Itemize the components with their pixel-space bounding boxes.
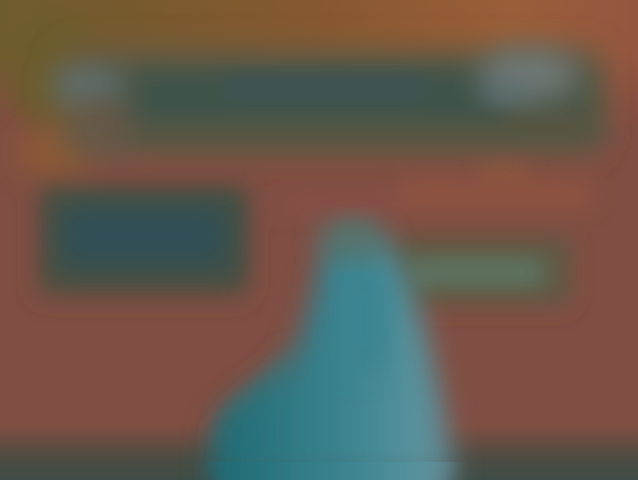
- soft mid layer: [17, 48, 600, 304]
- header highlight, right: [478, 48, 578, 100]
- figure top tint: [318, 222, 386, 258]
- header highlight, right lower: [481, 82, 529, 102]
- panel: header: [50, 48, 600, 152]
- red-brown accent, centre right: [285, 162, 590, 217]
- header band, lower brown: [135, 116, 595, 140]
- header band, core: [135, 72, 505, 120]
- panel: left dark box: [38, 186, 248, 296]
- header highlight, left: [50, 68, 126, 104]
- header fade, left lower: [78, 104, 128, 152]
- panel: right bar: [392, 238, 570, 304]
- header halo: [60, 48, 600, 150]
- box halo: [38, 186, 248, 296]
- figure core: [345, 270, 385, 370]
- figure base: [215, 462, 447, 480]
- orange accent, left: [17, 126, 93, 178]
- header band, blue strip: [225, 76, 425, 98]
- central teal figure: [208, 222, 456, 480]
- figure shoulder: [215, 345, 300, 450]
- figure body: [208, 228, 456, 480]
